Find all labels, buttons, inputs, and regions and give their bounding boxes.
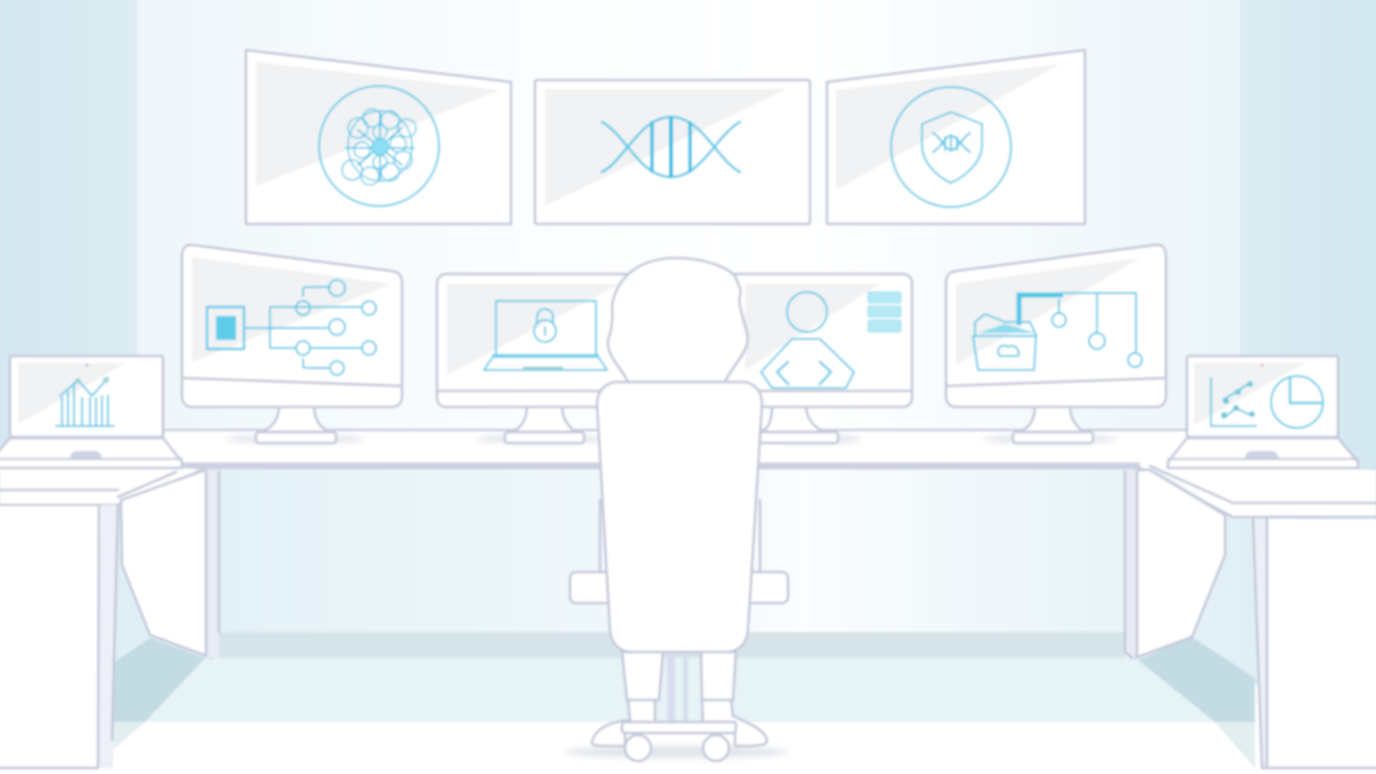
icon: pie chart <box>1271 376 1323 428</box>
monitor: top left, brain <box>246 50 511 224</box>
icon: folder with connected nodes <box>973 293 1142 370</box>
monitor: middle left, circuit network <box>182 245 402 443</box>
monitor: top centre, DNA <box>535 80 810 224</box>
left desk wing <box>0 470 219 768</box>
icon: DNA helix <box>602 117 740 177</box>
icon: brain network <box>342 109 416 185</box>
chair arms and uprights <box>570 500 788 603</box>
laptop: right, scatter and pie charts <box>1168 356 1358 468</box>
head <box>608 258 748 382</box>
icon: developer figure with code brackets <box>761 292 901 388</box>
monitor: middle centre-right, developer <box>700 274 912 443</box>
icon: bar and line chart <box>56 377 114 426</box>
chair back <box>597 382 762 652</box>
monitor: middle right, cloud folder <box>946 245 1166 443</box>
right desk wing <box>1124 466 1376 768</box>
person seated in chair <box>565 258 789 761</box>
monitor: middle centre-left, laptop lock <box>437 274 637 443</box>
icon: laptop with padlock <box>484 301 607 370</box>
icon: chip with circuit nodes <box>207 280 376 375</box>
desk <box>0 430 1376 768</box>
icon: DNA shield <box>922 112 982 183</box>
icon: scatter chart <box>1211 378 1256 426</box>
monitor: top right, shield <box>827 50 1085 224</box>
laptop: left, bar chart <box>0 356 182 468</box>
chair base, legs and wheels <box>565 652 789 761</box>
